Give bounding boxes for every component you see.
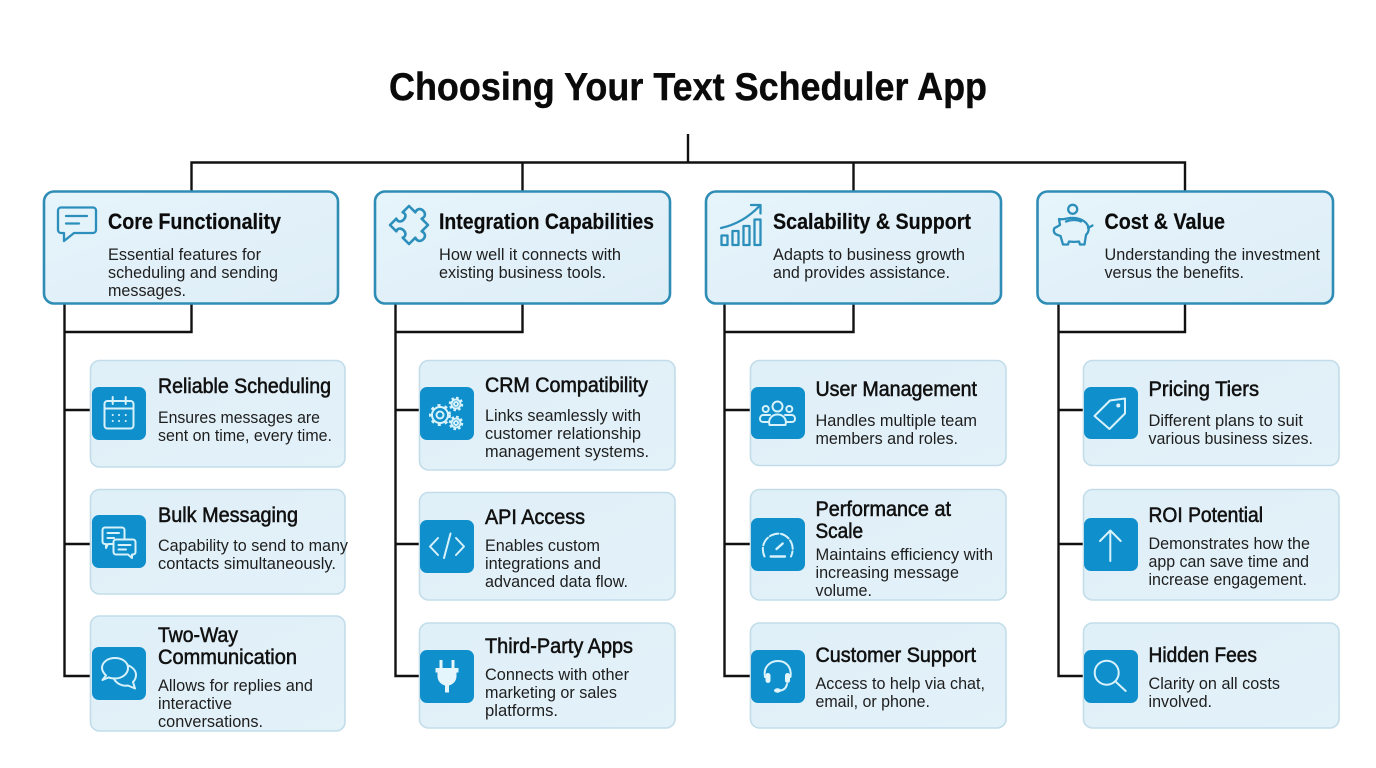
icon: plug — [436, 660, 458, 692]
panel: scalability and support header: and provides assistance. — [773, 264, 950, 282]
card: api access: integrations and — [485, 555, 601, 573]
panel: cost and value header: Understanding the investment — [1104, 246, 1320, 264]
panel: core functionality header — [44, 192, 338, 304]
card: two-way communication — [90, 616, 345, 731]
card: hidden fees: Hidden Fees — [1148, 644, 1257, 667]
card: crm compatibility: Links seamlessly with — [485, 407, 641, 425]
panel: integration capabilities header: existing business tools. — [439, 264, 606, 282]
icon: magnifying glass — [1095, 661, 1126, 691]
card: pricing tiers: Different plans to suit — [1148, 412, 1303, 430]
icon: speedometer — [763, 534, 793, 556]
icon: headset — [765, 661, 791, 693]
card: customer support: Customer Support — [816, 644, 976, 667]
card: customer support: Access to help via chat, — [816, 675, 985, 693]
card: bulk messaging — [90, 490, 349, 594]
card: reliable scheduling: Ensures messages are — [158, 409, 320, 427]
column: cost and value — [1038, 192, 1339, 728]
icon: up arrow — [1100, 530, 1121, 561]
panel: scalability and support header: Scalability & Support — [773, 209, 971, 234]
icon: calendar — [104, 397, 134, 428]
card: crm compatibility: CRM Compatibility — [485, 374, 648, 397]
column: scalability and support — [706, 192, 1006, 728]
card: roi potential: increase engagement. — [1148, 571, 1307, 589]
title: Choosing Your Text Scheduler App — [389, 66, 987, 109]
card: performance at scale — [750, 490, 1006, 600]
card: performance at scale: Maintains efficiency with — [816, 546, 993, 564]
icon: code brackets — [430, 534, 464, 558]
icon: gears — [430, 398, 462, 429]
card: user management — [750, 360, 1006, 466]
icon: chat bubble — [58, 208, 96, 241]
card: two-way communication: interactive — [158, 695, 232, 713]
icon: piggy bank — [1054, 205, 1092, 244]
icon: price tag — [1094, 398, 1125, 429]
card: performance at scale: Scale — [816, 520, 863, 543]
card: pricing tiers: various business sizes. — [1148, 430, 1313, 448]
card: crm compatibility: customer relationship — [485, 425, 641, 443]
icon: growth chart — [721, 205, 760, 245]
icon: puzzle piece — [390, 201, 438, 249]
card: third-party apps: Third-Party Apps — [485, 635, 633, 658]
card: bulk messaging: contacts simultaneously. — [158, 555, 336, 573]
card: roi potential: ROI Potential — [1148, 504, 1263, 527]
card: user management: User Management — [816, 378, 977, 401]
panel: integration capabilities header — [375, 192, 670, 304]
card: crm compatibility — [420, 360, 675, 470]
card: customer support — [750, 623, 1006, 728]
card: third-party apps: Connects with other — [485, 666, 629, 684]
card: roi potential: app can save time and — [1148, 553, 1309, 571]
card: reliable scheduling: Reliable Scheduling — [158, 375, 331, 398]
card: two-way communication: conversations. — [158, 713, 263, 731]
panel: cost and value header: Cost & Value — [1104, 209, 1225, 234]
card: user management: Handles multiple team — [816, 412, 977, 430]
card: performance at scale: volume. — [816, 582, 872, 600]
column: core functionality — [44, 192, 349, 731]
card: pricing tiers — [1084, 360, 1339, 466]
panel: core functionality header: Core Functionality — [108, 209, 281, 234]
card: third-party apps: platforms. — [485, 702, 558, 720]
card: crm compatibility: management systems. — [485, 443, 649, 461]
card: hidden fees: involved. — [1148, 693, 1212, 711]
panel: cost and value header: versus the benefits. — [1104, 264, 1244, 282]
card: api access: API Access — [485, 506, 585, 529]
panel: core functionality header: scheduling and sending — [108, 264, 278, 282]
card: two-way communication: Two-Way — [158, 624, 238, 647]
card: roi potential: Demonstrates how the — [1148, 535, 1310, 553]
card: api access — [420, 492, 675, 600]
card: pricing tiers: Pricing Tiers — [1148, 378, 1259, 401]
panel: scalability and support header: Adapts to business growth — [773, 246, 965, 264]
card: bulk messaging: Capability to send to many — [158, 537, 349, 555]
panel: core functionality header: Essential features for — [108, 246, 261, 264]
panel: cost and value header — [1038, 192, 1333, 304]
card: two-way communication: Communication — [158, 646, 297, 669]
icon: team — [760, 402, 795, 425]
panel: integration capabilities header: How well it connects with — [439, 246, 621, 264]
card: performance at scale: Performance at — [816, 498, 951, 521]
icon: conversation bubbles — [102, 658, 136, 688]
card: api access: advanced data flow. — [485, 573, 628, 591]
card: hidden fees — [1084, 623, 1339, 728]
card: performance at scale: increasing message — [816, 564, 959, 582]
card: user management: members and roles. — [816, 430, 958, 448]
card: third-party apps — [420, 623, 675, 728]
panel: core functionality header: messages. — [108, 282, 186, 300]
icon: message stack — [102, 528, 136, 558]
card: roi potential — [1084, 490, 1339, 600]
card: bulk messaging: Bulk Messaging — [158, 504, 298, 527]
panel: scalability and support header — [706, 192, 1001, 304]
card: customer support: email, or phone. — [816, 693, 930, 711]
card: reliable scheduling — [90, 360, 345, 467]
panel: integration capabilities header: Integration Capabilities — [439, 209, 654, 234]
connector tree — [64, 134, 1185, 676]
card: two-way communication: Allows for replies and — [158, 677, 313, 695]
column: integration capabilities — [375, 192, 675, 728]
card: reliable scheduling: sent on time, every time. — [158, 427, 332, 445]
card: api access: Enables custom — [485, 537, 600, 555]
card: hidden fees: Clarity on all costs — [1148, 675, 1280, 693]
card: third-party apps: marketing or sales — [485, 684, 617, 702]
